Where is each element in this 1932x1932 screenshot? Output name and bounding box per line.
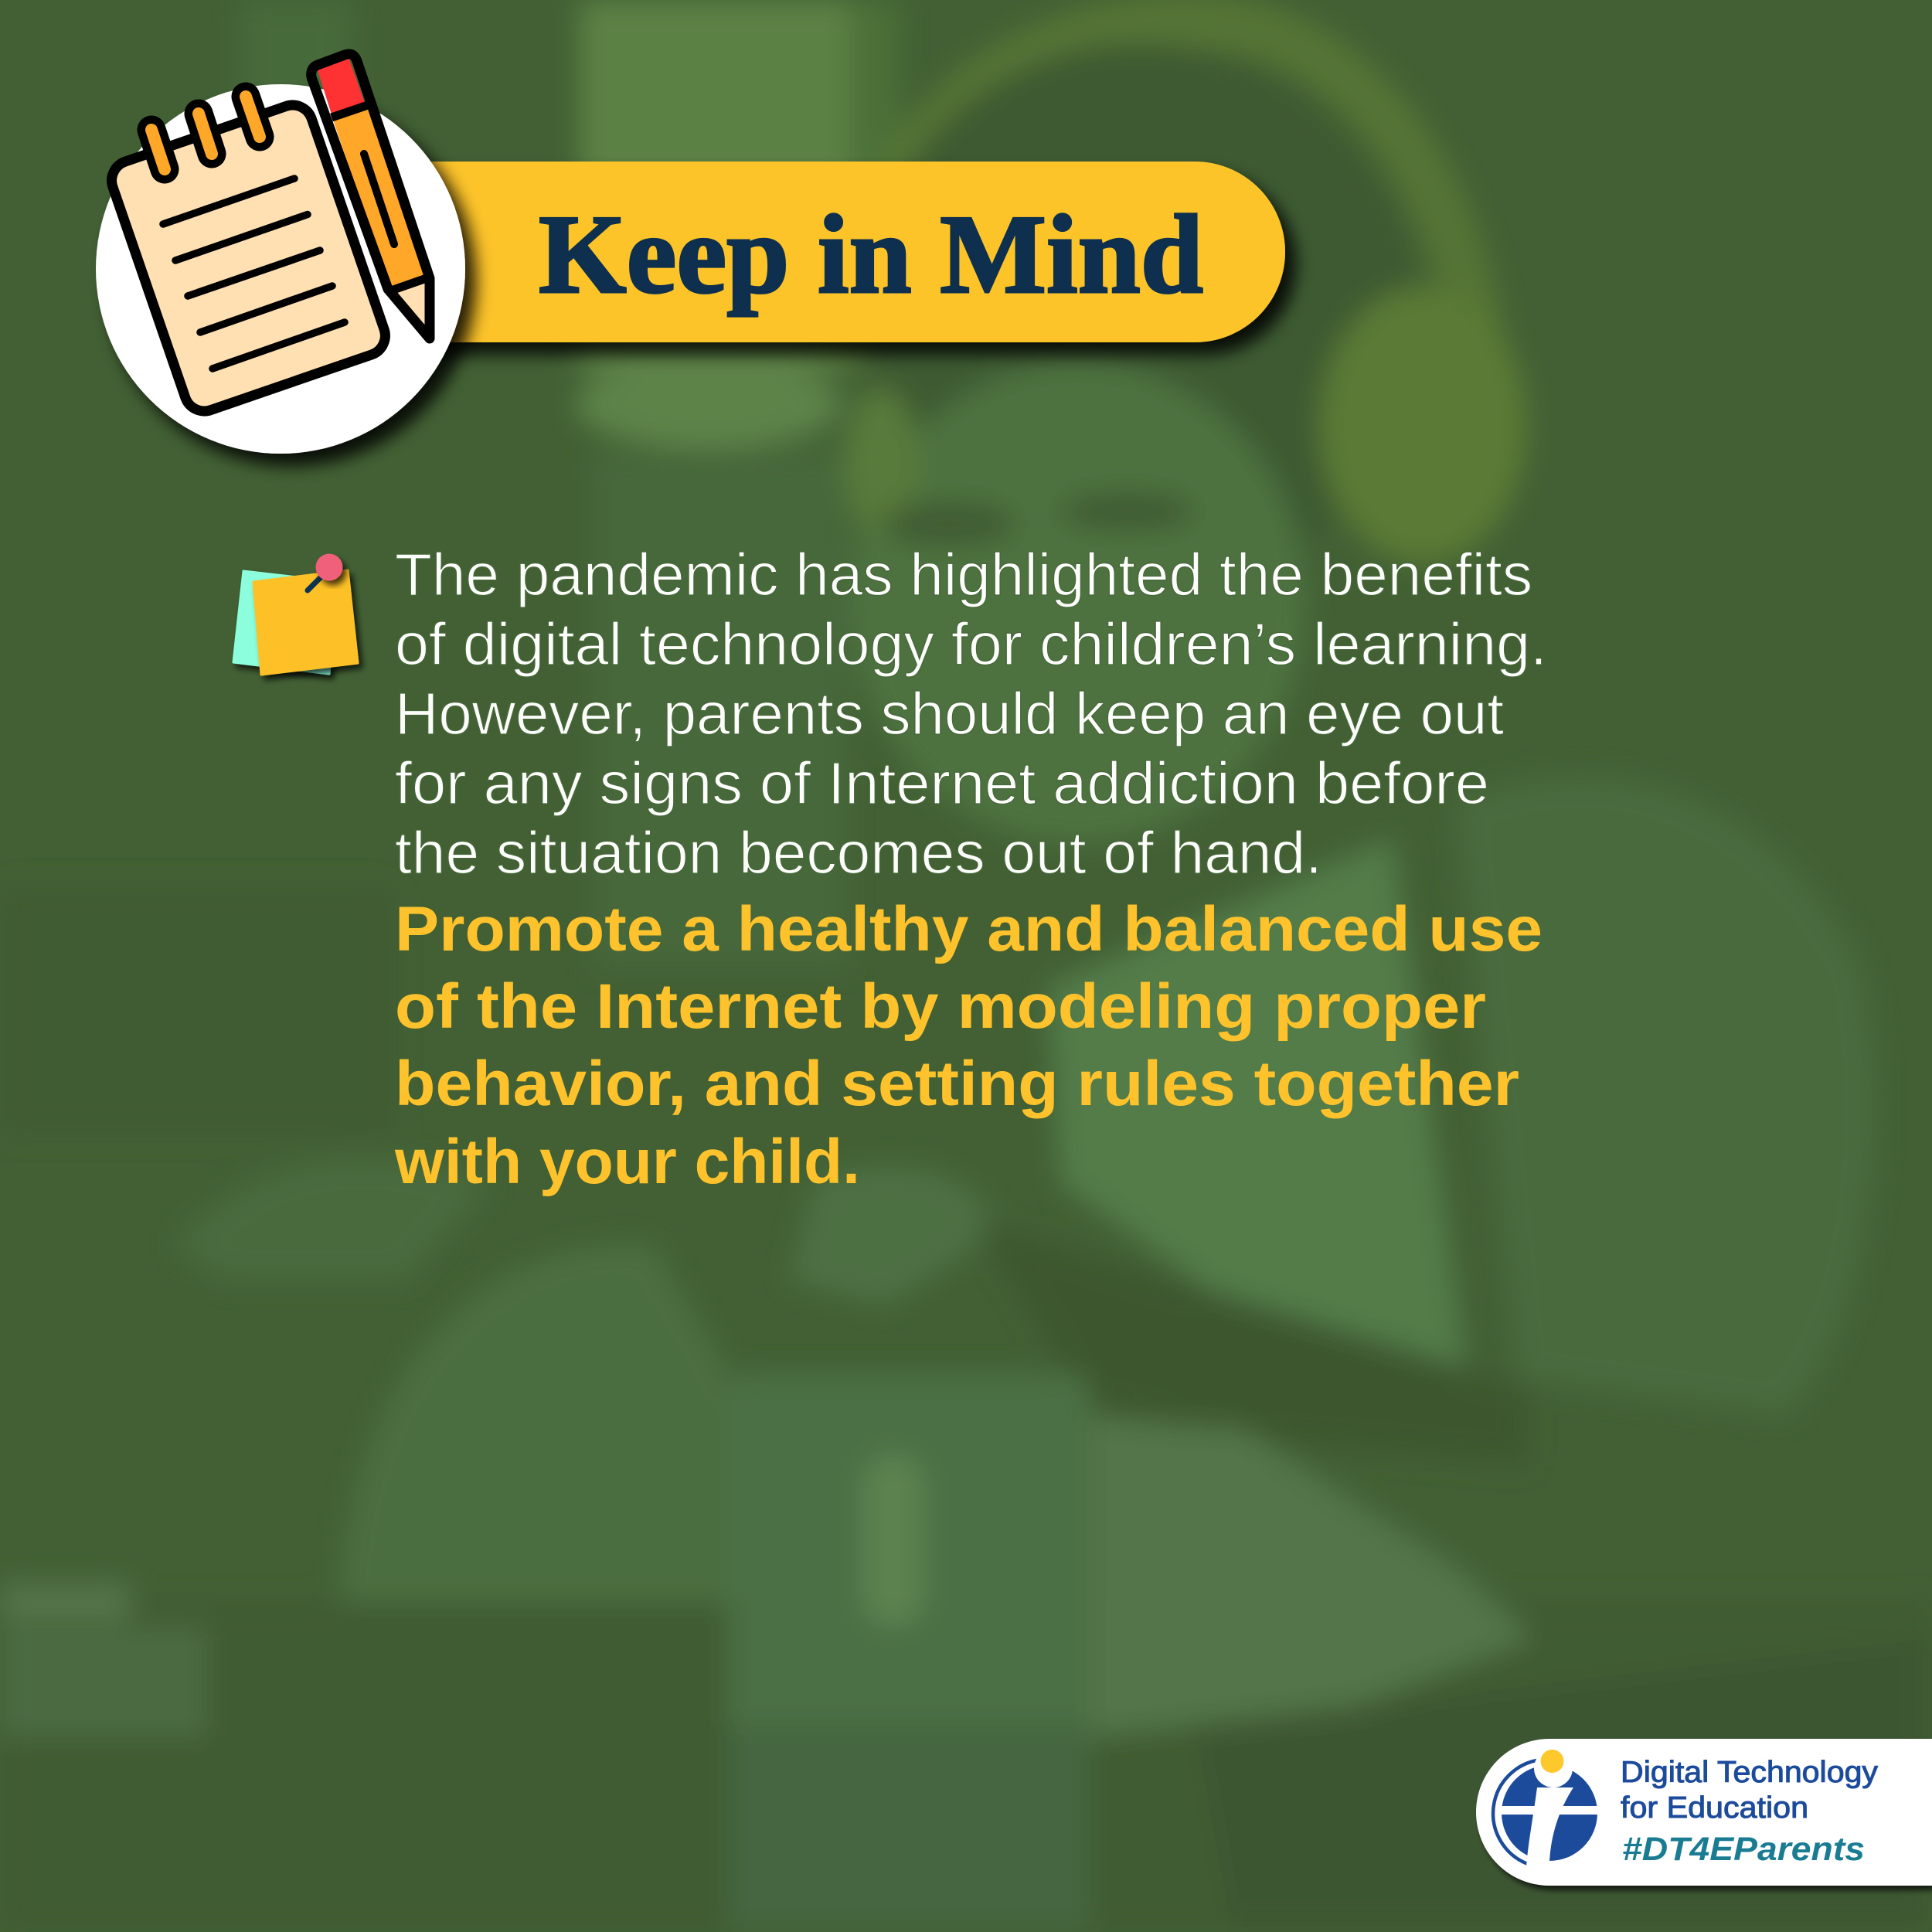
title text: Keep in Mind xyxy=(539,192,1203,317)
icon: sticky notes with pin xyxy=(233,553,358,675)
notepad ruled lines xyxy=(163,179,345,369)
logo text: #DT4EParents xyxy=(1622,1831,1865,1868)
highlighted advice text xyxy=(394,894,1543,1197)
body paragraph xyxy=(395,542,1547,886)
body paragraph: However, parents should keep an eye out xyxy=(395,681,1504,747)
highlighted advice text: of the Internet by modeling proper xyxy=(395,971,1486,1042)
logo text xyxy=(1621,1756,1879,1868)
body paragraph: the situation becomes out of hand. xyxy=(395,820,1322,886)
body paragraph: The pandemic has highlighted the benefits xyxy=(395,542,1532,608)
body paragraph: for any signs of Internet addiction before xyxy=(395,750,1489,817)
notepad spiral rings xyxy=(151,97,260,169)
logo mark xyxy=(1493,1749,1600,1866)
body paragraph: of digital technology for children’s learning. xyxy=(395,611,1547,678)
logo text: Digital Technology xyxy=(1621,1756,1879,1789)
notepad page xyxy=(107,100,390,417)
highlighted advice text: behavior, and setting rules together xyxy=(395,1049,1519,1119)
highlighted advice text: with your child. xyxy=(394,1127,860,1197)
title banner xyxy=(340,162,1285,342)
logo badge: Digital Technology for Education xyxy=(1476,1739,1932,1886)
logo text: for Education xyxy=(1621,1791,1808,1825)
highlighted advice text: Promote a healthy and balanced use xyxy=(395,894,1543,964)
pencil xyxy=(311,54,430,338)
icon: notepad and pencil in white circle xyxy=(96,54,465,454)
